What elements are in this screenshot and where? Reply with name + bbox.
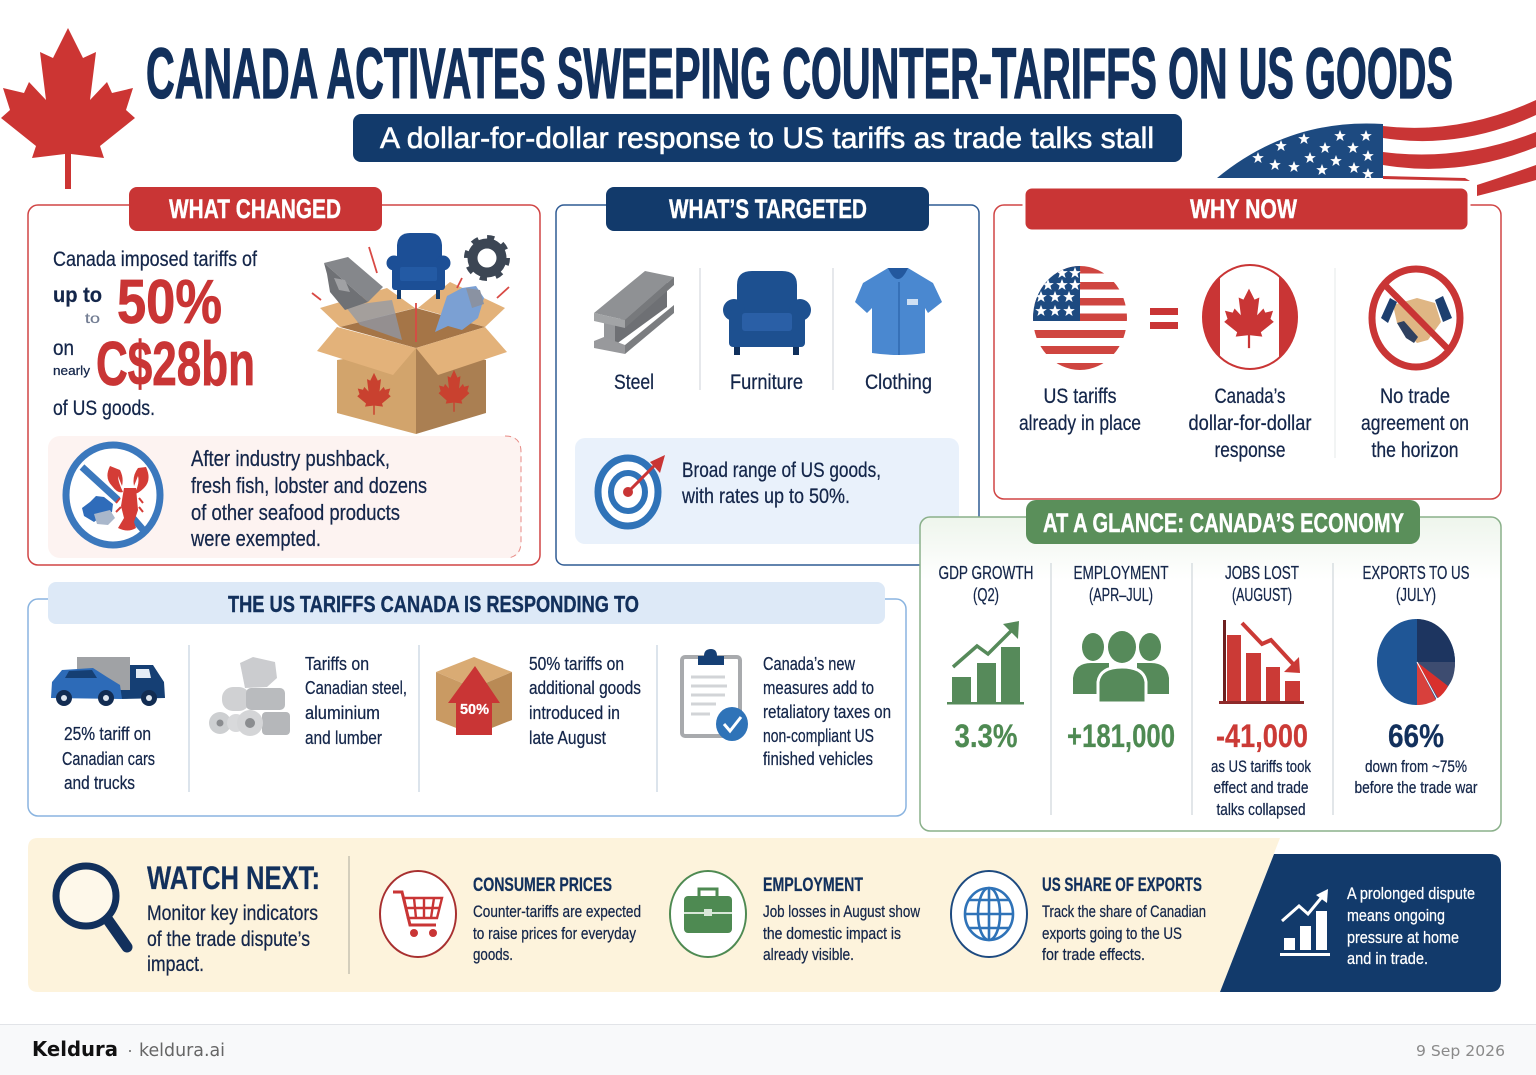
- label: US tariffs: [1019, 385, 1141, 435]
- text: tariff headline figures: Canada imposed tariffs of: [53, 248, 257, 271]
- stat: GDP growth: GDP GROWTH: [938, 563, 1034, 583]
- icon: rising chart: [1280, 889, 1330, 956]
- stat: exports to US: 66%: [1388, 718, 1444, 754]
- text: steel: and lumber: [305, 728, 382, 748]
- text: broad range: Broad range of US goods,: [682, 459, 881, 482]
- text: tariff headline figures: C$28bn: [96, 330, 255, 399]
- subtitle banner: A dollar-for-dollar response to US tariffs as trade talks stall: [380, 122, 1154, 155]
- text: watch next: of the trade dispute’s: [147, 928, 310, 951]
- icon: US flag circle: [1033, 266, 1127, 370]
- stat: jobs lost: JOBS LOST: [1225, 563, 1299, 583]
- icon: car and truck: [51, 657, 165, 706]
- text: broad range: with rates up to 50%.: [681, 485, 850, 508]
- icon: no seafood: [66, 445, 160, 545]
- stat: employment: +181,000: [1067, 718, 1175, 754]
- footer: Keldura: [32, 1037, 118, 1061]
- heading: at a glance: AT A GLANCE: CANADA’S ECONOMY: [1043, 508, 1404, 538]
- heading: what changed: WHAT CHANGED: [169, 194, 341, 224]
- item: retaliatory taxes: [682, 649, 891, 769]
- stat: employment: [1067, 563, 1175, 754]
- text: tariff headline figures: nearly: [53, 363, 91, 378]
- panel: watch next: [28, 838, 1280, 992]
- text: 50 percent: 50% tariffs on: [529, 654, 624, 674]
- text: retaliatory: [763, 654, 891, 769]
- text: 50 percent: introduced in: [529, 703, 620, 723]
- text: prolonged dispute: and in trade.: [1347, 949, 1428, 968]
- label: Canada response: Canada’s: [1214, 385, 1286, 408]
- icon: box with arrow: [436, 657, 512, 735]
- label: clothing: Clothing: [865, 371, 932, 394]
- icon: people: [1073, 631, 1169, 703]
- text: 50 percent: late August: [529, 728, 606, 748]
- label: Canada response: response: [1214, 439, 1286, 462]
- icon: Canada flag circle: [1203, 265, 1297, 369]
- text: cars: and trucks: [64, 773, 135, 793]
- text: tariff headline figures: [53, 248, 257, 420]
- text: tariff headline figures: of US goods.: [53, 397, 155, 420]
- label: no trade agreement: the horizon: [1372, 439, 1458, 462]
- text: retaliatory: finished vehicles: [763, 749, 873, 769]
- text: prolonged dispute: [1347, 884, 1475, 968]
- text: consumer prices: CONSUMER PRICES: [473, 875, 612, 896]
- text: broad range: [681, 459, 881, 508]
- stat: jobs lost: effect and trade: [1214, 778, 1308, 797]
- icon: globe: [951, 871, 1027, 957]
- item: 50 percent tariffs: [436, 654, 641, 748]
- text: exemption note: were exempted.: [190, 526, 321, 551]
- text: prolonged dispute: means ongoing: [1347, 906, 1445, 925]
- panel: at a glance: [920, 500, 1501, 831]
- text: steel: aluminium: [305, 703, 380, 723]
- icon: maple leaf: [1, 28, 135, 189]
- heading: US tariffs: [48, 582, 885, 624]
- text: consumer prices: goods.: [473, 945, 513, 964]
- item: consumer prices: [380, 871, 641, 964]
- text: prolonged dispute: A prolonged dispute: [1347, 884, 1475, 903]
- heading: why now: [1024, 187, 1469, 231]
- text: tariff headline figures: 50%: [117, 268, 222, 337]
- icon: no trade deal handshake: [1372, 269, 1460, 367]
- icon: shopping cart: [380, 871, 456, 957]
- stat: exports to US: before the trade war: [1354, 778, 1478, 797]
- callout: broad range: [575, 438, 959, 544]
- stat: jobs lost: [1211, 563, 1311, 819]
- label: steel: Steel: [614, 371, 654, 394]
- panel: the US tariffs Canada is responding to: [28, 582, 906, 816]
- text: exemption note: [190, 446, 427, 551]
- text: 50 percent: [529, 654, 641, 748]
- icon: clipboard with check: [682, 649, 748, 741]
- text: watch next: WATCH NEXT:: [147, 860, 320, 896]
- text: retaliatory: retaliatory taxes on: [763, 702, 891, 722]
- text: employment: EMPLOYMENT: [763, 875, 863, 896]
- stat: employment: EMPLOYMENT: [1074, 563, 1168, 583]
- heading: what's targeted: [606, 187, 929, 231]
- label: no trade agreement: No trade: [1380, 385, 1450, 408]
- panel: what's targeted: [556, 187, 979, 565]
- footer: keldura.ai: [139, 1040, 225, 1061]
- text: watch next: impact.: [147, 953, 204, 976]
- text: steel: Tariffs on: [305, 654, 369, 674]
- stat: exports to US: (JULY): [1396, 585, 1436, 605]
- text: 50 percent: additional goods: [529, 678, 641, 698]
- text: employment: already visible.: [763, 945, 854, 964]
- text: employment: the domestic impact is: [763, 924, 901, 943]
- chart: exports pie: [1377, 619, 1455, 705]
- text: US share: US SHARE OF EXPORTS: [1042, 875, 1202, 896]
- icon: metal rolls: [209, 657, 290, 736]
- icon: magnifying glass: [56, 866, 127, 947]
- subtitle banner: [353, 114, 1182, 162]
- icon: box with arrow: 50%: [460, 701, 489, 718]
- heading: what changed: [129, 187, 382, 231]
- text: cars: 25% tariff on: [64, 724, 151, 744]
- text: retaliatory: Canada’s new: [763, 654, 856, 674]
- icon: briefcase: [670, 871, 746, 957]
- text: employment: [763, 875, 921, 964]
- icon: target: [598, 455, 665, 526]
- stat: exports to US: down from ~75%: [1365, 757, 1467, 776]
- label: US tariffs: US tariffs: [1044, 385, 1116, 408]
- label: US tariffs: already in place: [1019, 412, 1141, 435]
- text: tariff headline figures: up to: [53, 284, 102, 307]
- icon: US flag corner: [1217, 100, 1536, 196]
- item: steel aluminium lumber: [209, 654, 407, 748]
- stat: jobs lost: talks collapsed: [1216, 800, 1306, 819]
- stat: jobs lost: (AUGUST): [1232, 585, 1292, 605]
- icon: steel beam: [594, 271, 674, 354]
- footer: [0, 1024, 1536, 1075]
- text: consumer prices: [473, 875, 641, 964]
- stat: employment: (APR–JUL): [1089, 585, 1153, 605]
- label: Canada response: dollar-for-dollar: [1188, 412, 1312, 435]
- text: cars: [62, 724, 155, 793]
- text: US share: exports going to the US: [1042, 924, 1182, 943]
- text: cars: Canadian cars: [62, 749, 155, 769]
- panel: what changed: [28, 187, 540, 565]
- text: tariff headline figures: on: [53, 337, 74, 360]
- label: furniture: Furniture: [730, 371, 803, 394]
- label: no trade agreement: [1361, 385, 1469, 462]
- label: no trade agreement: agreement on: [1361, 412, 1469, 435]
- stat: jobs lost: as US tariffs took: [1211, 757, 1311, 776]
- item: cars and trucks: [51, 657, 165, 793]
- item: employment: [670, 871, 921, 964]
- footer: ·: [127, 1040, 133, 1060]
- stat: exports to US: [1354, 563, 1478, 797]
- text: US share: [1042, 875, 1206, 964]
- text: consumer prices: Counter-tariffs are expected: [473, 902, 641, 921]
- text: consumer prices: to raise prices for everyday: [473, 924, 636, 943]
- text: retaliatory: non-compliant US: [763, 726, 874, 746]
- icon: falling bars: [1219, 620, 1304, 704]
- text: US share: Track the share of Canadian: [1042, 902, 1206, 921]
- text: exemption note: After industry pushback,: [191, 446, 390, 471]
- text: US share: for trade effects.: [1042, 945, 1145, 964]
- label: Canada response: [1188, 385, 1312, 462]
- text: watch next: [147, 860, 320, 976]
- text: retaliatory: measures add to: [763, 678, 874, 698]
- text: tariff headline figures: to: [85, 310, 100, 326]
- stat: exports to US: EXPORTS TO US: [1362, 563, 1470, 583]
- heading: what's targeted: WHAT’S TARGETED: [669, 194, 867, 224]
- text: exemption note: fresh fish, lobster and dozens: [191, 473, 427, 498]
- text: exemption note: of other seafood products: [191, 500, 400, 525]
- icon: open box with goods: [312, 233, 509, 434]
- icon: rising bars: [947, 621, 1024, 704]
- heading: US tariffs: THE US TARIFFS CANADA IS RESPONDING TO: [228, 591, 639, 617]
- stat: GDP growth: (Q2): [973, 585, 999, 605]
- text: watch next: Monitor key indicators: [147, 902, 318, 925]
- callout: prolonged dispute: [1220, 854, 1501, 992]
- footer: 9 Sep 2026: [1416, 1042, 1505, 1060]
- stat: jobs lost: -41,000: [1216, 718, 1308, 754]
- icon: armchair: [723, 271, 811, 355]
- callout: seafood exemption: [48, 436, 521, 558]
- item: US share of exports: [951, 871, 1206, 964]
- text: prolonged dispute: pressure at home: [1347, 928, 1459, 947]
- icon: shirt: [855, 268, 942, 355]
- panel: why now: [994, 187, 1501, 499]
- heading: why now: WHY NOW: [1190, 194, 1297, 224]
- text: steel: [305, 654, 407, 748]
- stat: GDP growth: 3.3%: [954, 718, 1018, 754]
- icon: equals sign: [1150, 308, 1178, 329]
- text: steel: Canadian steel,: [305, 678, 407, 698]
- stat: GDP growth: [938, 563, 1034, 754]
- text: employment: Job losses in August show: [763, 902, 921, 921]
- heading: at a glance: [1026, 500, 1420, 544]
